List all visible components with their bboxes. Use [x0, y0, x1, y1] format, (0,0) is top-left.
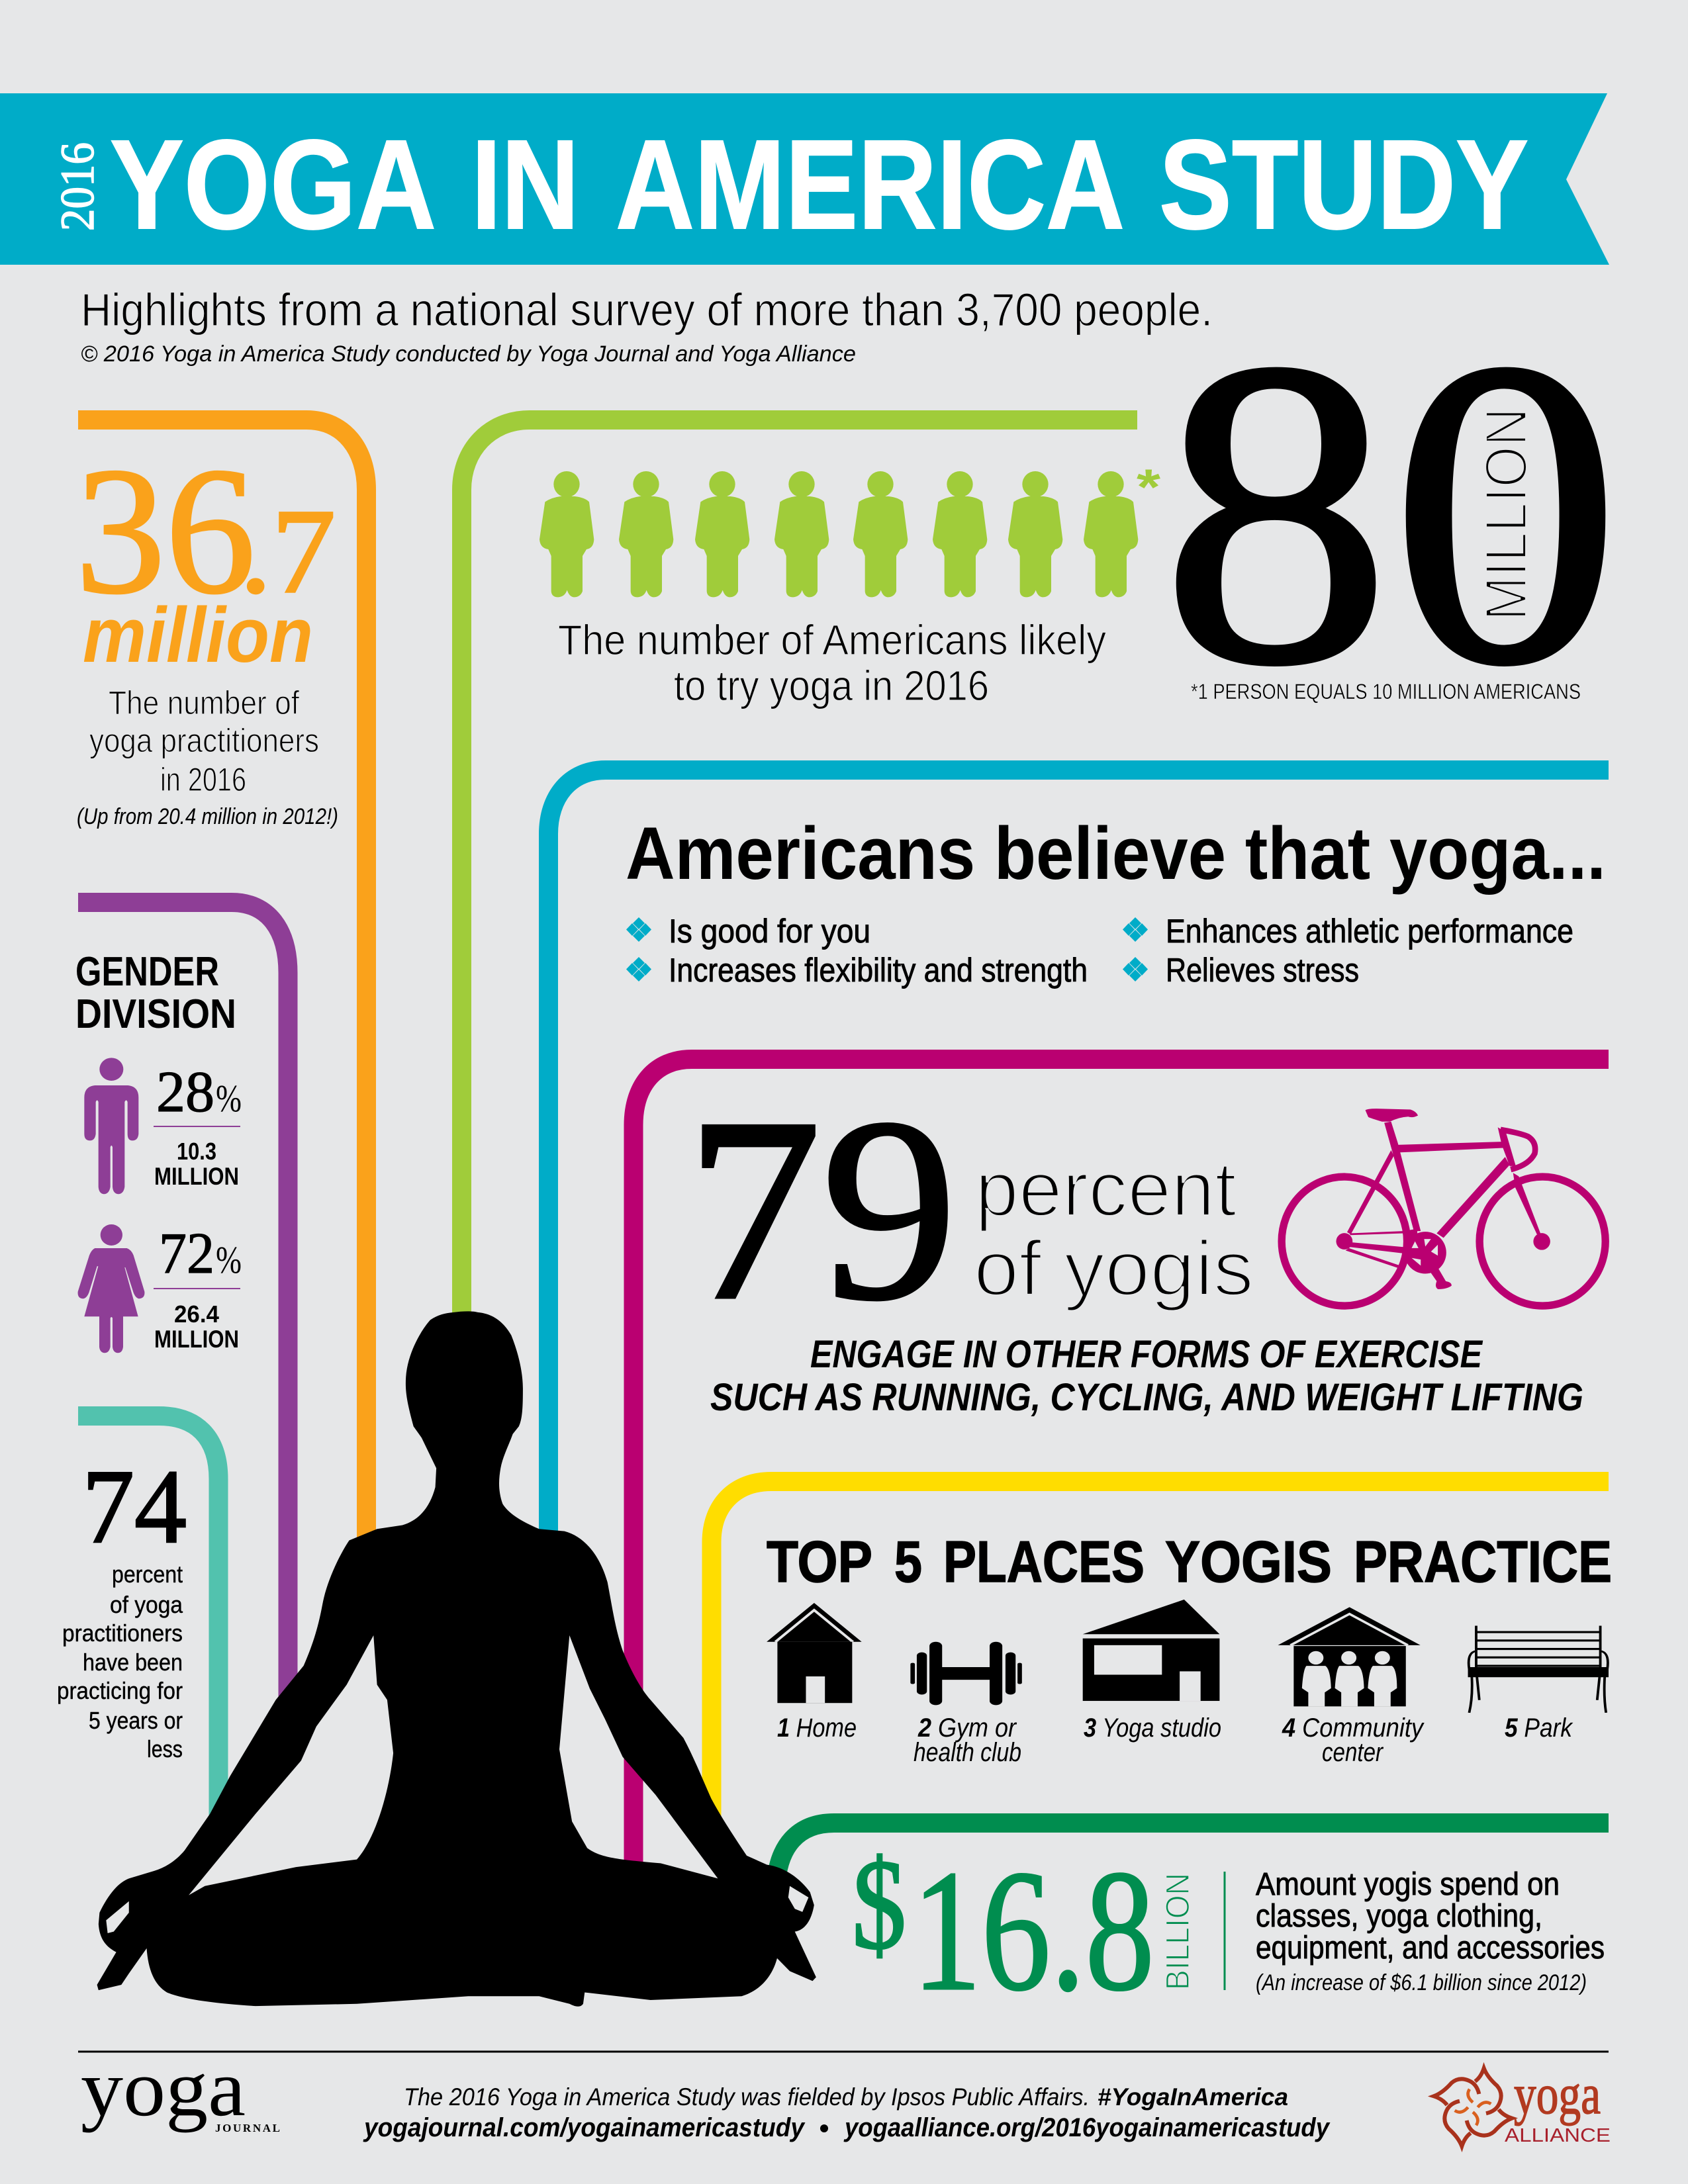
icon: person — [619, 471, 673, 597]
stat: 16.8 billion dollars: 16.8 — [912, 1835, 1154, 2026]
title — [110, 113, 1528, 255]
icon labels: center — [1322, 1738, 1383, 1767]
description: percent — [112, 1561, 183, 1588]
rail: yellow — [712, 1481, 1609, 1833]
stat: 16.8 billion dollars: $ — [852, 1833, 906, 1976]
description: Amount yogis spend on — [1256, 1867, 1560, 1902]
description: to try yoga in 2016 — [674, 662, 989, 709]
stat: 72 percent women: % — [216, 1238, 242, 1281]
icon: community center — [1278, 1607, 1421, 1706]
banner ribbon — [0, 93, 1609, 265]
panel: Americans believe — [626, 812, 1606, 989]
icon: person — [539, 471, 594, 597]
description — [1256, 1867, 1605, 1966]
icon labels: 1 Home — [777, 1713, 857, 1743]
footer text: #YogaInAmerica — [1098, 2083, 1288, 2111]
copyright line: © 2016 Yoga in America Study conducted by Yoga Journal and Yoga Alliance — [81, 341, 856, 367]
rail: purple — [78, 903, 288, 1734]
bullet list — [626, 913, 1573, 989]
rail: orange — [78, 420, 367, 1549]
stat: 80: 80 — [1161, 271, 1620, 754]
title: AMERICA — [616, 113, 1125, 255]
asterisk: * — [1137, 459, 1161, 516]
icon: bullet — [626, 957, 651, 981]
stat: 72 percent women: MILLION — [154, 1326, 239, 1353]
title: YOGA — [110, 113, 436, 255]
description: equipment, and accessories — [1256, 1931, 1605, 1966]
heading: 5 — [894, 1529, 922, 1594]
bullet text: Is good for you — [669, 913, 870, 950]
description: of yoga — [110, 1591, 183, 1618]
icon labels: 2 Gym or — [917, 1713, 1017, 1743]
icon: person — [933, 471, 987, 597]
stat: 28 percent men: MILLION — [154, 1163, 239, 1190]
rail: magenta — [633, 1059, 1609, 1873]
icon row: eight people — [539, 471, 1138, 597]
stat: 28 percent men: 10.3 — [177, 1138, 216, 1165]
heading: PRACTICE — [1354, 1529, 1612, 1594]
footer text: yogaalliance.org/2016yogainamericastudy — [843, 2113, 1331, 2142]
panel: 74 percent — [57, 1447, 187, 1762]
year label: 2016 — [51, 142, 104, 231]
stat: 79: 79 — [686, 1065, 957, 1354]
label: percent of yogis — [974, 1146, 1254, 1312]
description: ENGAGE IN OTHER FORMS OF EXERCISE — [810, 1333, 1483, 1376]
label: percent of yogis: of yogis — [974, 1225, 1254, 1312]
description: practitioners — [62, 1619, 183, 1647]
description: The number of Americans likely — [558, 616, 1106, 664]
footer rule — [78, 2050, 1609, 2053]
icon: woman — [78, 1224, 144, 1353]
icon: bullet — [1123, 917, 1148, 942]
stat: 72 percent women: 72 — [159, 1222, 214, 1286]
description: 5 years or — [89, 1707, 183, 1734]
description: less — [147, 1735, 183, 1762]
note: (Up from 20.4 million in 2012!) — [77, 804, 338, 829]
heading: Americans believe that yoga... — [626, 812, 1606, 895]
description: SUCH AS RUNNING, CYCLING, AND WEIGHT LIFTING — [710, 1376, 1583, 1419]
panel: 16.8 billion — [852, 1833, 1605, 2026]
footer text: The 2016 Yoga in America Study was fielded by Ipsos Public Affairs. — [404, 2083, 1090, 2111]
icon labels: 3 Yoga studio — [1084, 1713, 1221, 1743]
coloured rails — [78, 420, 1609, 1886]
stat: 74: 74 — [82, 1447, 187, 1565]
description: in 2016 — [160, 761, 246, 798]
icon: gym — [910, 1642, 1022, 1705]
panel: 36.7 million practitioners — [75, 431, 338, 829]
label: million: MILLION — [1474, 408, 1540, 621]
note: (An increase of $6.1 billion since 2012) — [1256, 1970, 1587, 1995]
icon: bicycle — [1282, 1109, 1605, 1306]
footnote: *1 PERSON EQUALS 10 MILLION AMERICANS — [1191, 680, 1581, 704]
footer text: yogajournal.com/yogainamericastudy — [363, 2113, 806, 2142]
subtitle: Highlights from a national survey of more than 3,700 people. — [81, 284, 1213, 336]
rail: cyan — [548, 770, 1609, 1549]
icon labels: health club — [914, 1738, 1021, 1767]
stat: 36.7 — [75, 431, 336, 631]
stat: 36.7: .7 — [240, 485, 336, 618]
icon: park bench — [1468, 1625, 1609, 1713]
logo: Yoga Journal: JOURNAL — [215, 2122, 280, 2134]
silhouette: meditating figure — [97, 1311, 816, 2007]
description — [710, 1333, 1583, 1419]
description: practicing for — [57, 1677, 183, 1704]
description: The number of — [109, 684, 299, 721]
label: percent of yogis: percent — [975, 1146, 1237, 1233]
emblem — [1434, 2068, 1512, 2146]
bullet text: Relieves stress — [1166, 952, 1359, 989]
icon labels: 5 Park — [1505, 1713, 1573, 1743]
panel: gender division — [75, 949, 242, 1353]
description — [57, 1561, 183, 1762]
divider — [1223, 1872, 1226, 1990]
heading: YOGIS — [1165, 1529, 1332, 1594]
stat: 72 percent women: 26.4 — [174, 1300, 219, 1328]
icon: yoga studio — [1083, 1600, 1219, 1701]
icon: person — [774, 471, 829, 597]
heading: TOP — [767, 1529, 872, 1594]
icon labels: 4 Community — [1282, 1713, 1425, 1743]
heading — [767, 1529, 1612, 1594]
icon: man — [84, 1058, 138, 1194]
panel: 79 percent — [686, 1065, 1605, 1419]
heading: DIVISION — [75, 991, 236, 1037]
title: IN — [471, 113, 579, 255]
logo: Yoga Alliance — [1434, 2062, 1611, 2146]
label: billion: BILLION — [1159, 1873, 1196, 1990]
description: yoga practitioners — [89, 722, 319, 759]
stat: 28 percent men — [154, 1060, 242, 1190]
rail: teal — [78, 1416, 218, 1840]
bullet text: Enhances athletic performance — [1166, 913, 1573, 950]
icon: bullet — [626, 917, 651, 942]
logo: Yoga Alliance: ALLIANCE — [1505, 2125, 1611, 2146]
bullet text: Increases flexibility and strength — [669, 952, 1088, 989]
icon labels — [777, 1713, 1573, 1767]
footer text — [363, 2083, 1331, 2142]
heading: GENDER — [75, 949, 219, 995]
stat: 28 percent men: 28 — [156, 1060, 214, 1124]
heading: PLACES — [943, 1529, 1145, 1594]
description: have been — [83, 1649, 183, 1676]
description: classes, yoga clothing, — [1256, 1899, 1542, 1934]
panel: 80 million — [539, 271, 1620, 754]
rail: lime — [462, 420, 1137, 1337]
icon: bullet — [1123, 957, 1148, 981]
logo: Yoga Journal: yoga — [81, 2044, 246, 2133]
title: STUDY — [1159, 113, 1528, 255]
stat: 36.7: 36 — [75, 431, 256, 631]
icon: person — [695, 471, 749, 597]
stat: 72 percent women — [154, 1222, 242, 1353]
heading — [75, 949, 236, 1037]
bullet text — [669, 913, 1573, 989]
rail: green — [776, 1823, 1609, 1886]
stat: 28 percent men: % — [216, 1077, 242, 1120]
description — [558, 616, 1106, 709]
wordmark: yoga — [1514, 2062, 1601, 2126]
stat: 16.8 billion dollars — [852, 1833, 1154, 2026]
word: million: million — [83, 592, 313, 679]
icon: person — [853, 471, 908, 597]
panel: top 5 places — [767, 1529, 1612, 1767]
icon: person — [1084, 471, 1138, 597]
icon: home — [767, 1603, 862, 1703]
description — [89, 684, 319, 798]
icon: person — [1008, 471, 1062, 597]
